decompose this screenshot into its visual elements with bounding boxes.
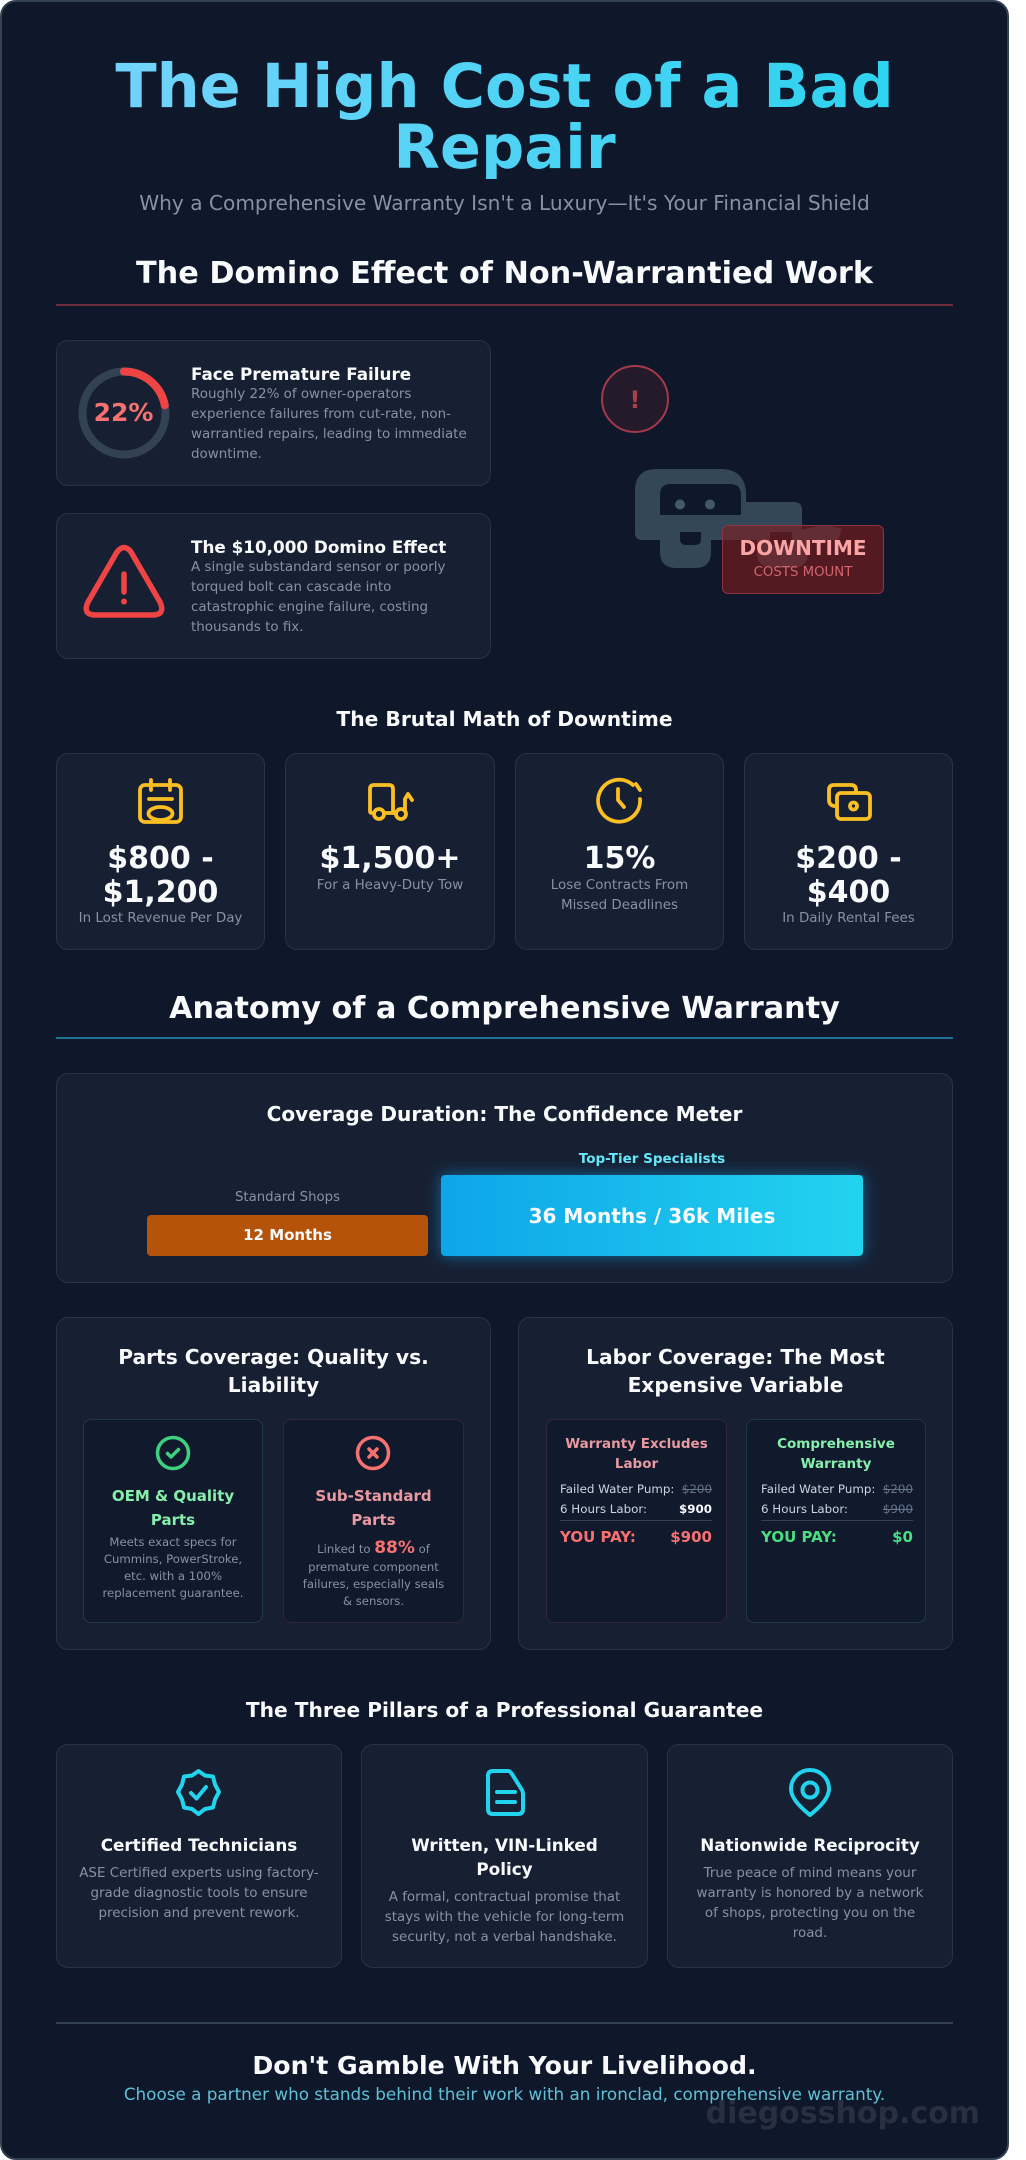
card title: Nationwide Reciprocity — [700, 1835, 920, 1855]
card text: security, not a verbal handshake. — [392, 1930, 617, 1945]
card text: grade diagnostic tools to ensure — [90, 1886, 308, 1901]
card text: torqued bolt can cascade into — [191, 580, 391, 594]
icon: warning triangle — [83, 544, 164, 618]
card title — [315, 1486, 432, 1528]
panel: labor coverage — [518, 1317, 953, 1650]
card text: & sensors. — [343, 1594, 404, 1608]
card text — [191, 386, 467, 462]
card text: warrantied repairs, leading to immediate — [191, 426, 467, 442]
panel: coverage duration — [56, 1073, 953, 1283]
watermark: diegosshop.com — [706, 2096, 980, 2131]
card title: Labor — [615, 1456, 658, 1472]
panel title: Expensive Variable — [628, 1372, 843, 1396]
total: $0 — [892, 1528, 913, 1546]
panel title: Labor Coverage: The Most — [586, 1345, 885, 1369]
panel: premature failure — [56, 340, 491, 486]
bar: 36 months: 36 Months / 36k Miles — [529, 1204, 775, 1228]
card text: replacement guarantee. — [103, 1586, 243, 1600]
title: The High Cost of a Bad — [115, 52, 894, 122]
card text: road. — [793, 1926, 827, 1941]
card text: failures, especially seals — [303, 1577, 444, 1591]
heading: brutal math: The Brutal Math of Downtime — [336, 707, 673, 731]
heading: three pillars: The Three Pillars of a Professional Guarantee — [246, 1698, 763, 1722]
footer text: Choose a partner who stands behind their work with an ironclad, comprehensive warranty. — [124, 2084, 885, 2104]
panel title — [118, 1345, 429, 1396]
total: YOU PAY: — [560, 1528, 636, 1546]
card title: Comprehensive — [777, 1436, 895, 1452]
stat value: $1,500+ — [320, 841, 460, 876]
bar: 12 months — [147, 1215, 428, 1256]
card title: Warranty Excludes — [565, 1436, 708, 1452]
stat value: 15% — [584, 841, 655, 876]
stat value: $200 - — [795, 841, 902, 876]
card: sub-standard parts — [283, 1419, 464, 1623]
card text: Cummins, PowerStroke, — [104, 1552, 242, 1566]
stat value — [103, 841, 218, 910]
card text — [103, 1535, 243, 1600]
footer heading: Don't Gamble With Your Livelihood. — [252, 2051, 757, 2080]
cost rows: Failed Water Pump: — [761, 1482, 875, 1496]
card text: precision and prevent rework. — [98, 1906, 300, 1921]
card text: A formal, contractual promise that — [389, 1890, 620, 1905]
card: comprehensive warranty — [746, 1419, 926, 1623]
card title: The $10,000 Domino Effect — [191, 537, 446, 557]
card text: of shops, protecting you on the — [705, 1906, 915, 1921]
donut chart: 22%: 22% — [94, 398, 153, 427]
label: top-tier specialists: Top-Tier Specialists — [579, 1151, 725, 1167]
card text — [191, 560, 445, 634]
cost rows: $900 — [679, 1502, 712, 1516]
panel title — [586, 1345, 885, 1396]
stat label: For a Heavy-Duty Tow — [317, 878, 463, 893]
card text: premature component — [308, 1560, 439, 1574]
bar: 36 months — [441, 1175, 863, 1256]
total: $900 — [670, 1528, 712, 1546]
icon: badge check — [176, 1769, 221, 1816]
card title — [112, 1486, 234, 1528]
total: YOU PAY: — [761, 1528, 837, 1546]
card: warranty excludes labor — [546, 1419, 727, 1623]
stat label: In Daily Rental Fees — [782, 911, 915, 926]
icon: cash — [827, 783, 872, 821]
title — [0, 57, 1009, 179]
subtitle: Why a Comprehensive Warranty Isn't a Luxury—It's Your Financial Shield — [139, 191, 870, 215]
icon: calendar with money — [138, 778, 183, 824]
stat card: tow — [285, 753, 495, 950]
stat label: Lose Contracts From — [551, 878, 688, 893]
stat card: lost contracts — [515, 753, 724, 950]
callout: downtime — [722, 525, 884, 594]
card title: Policy — [476, 1859, 533, 1879]
cost rows — [560, 1482, 712, 1516]
stat value — [795, 841, 902, 910]
card text: etc. with a 100% — [124, 1569, 222, 1583]
card title — [565, 1436, 708, 1472]
icon: check circle — [156, 1436, 190, 1470]
card title: Written, VIN-Linked — [411, 1835, 598, 1855]
pillar card: certified technicians — [56, 1744, 342, 1968]
cost rows: Failed Water Pump: — [560, 1482, 674, 1496]
cost rows: 6 Hours Labor: — [560, 1502, 647, 1516]
card text: stays with the vehicle for long-term — [385, 1910, 624, 1925]
card text: Linked to 88% of — [317, 1538, 430, 1558]
pillar card: written policy — [361, 1744, 648, 1968]
panel title: Parts Coverage: Quality vs. — [118, 1345, 429, 1369]
callout: downtime: DOWNTIME — [739, 536, 867, 560]
stat card: lost revenue — [56, 753, 265, 950]
total — [560, 1528, 712, 1546]
cost rows: $900 — [883, 1502, 913, 1516]
stat label — [551, 878, 688, 913]
card title: OEM & Quality — [112, 1486, 234, 1504]
donut chart: 22% — [78, 368, 170, 458]
card title: Parts — [151, 1510, 195, 1528]
callout: downtime: COSTS MOUNT — [754, 565, 852, 580]
stat value: $400 — [807, 875, 890, 910]
card title — [411, 1835, 598, 1879]
card text: A single substandard sensor or poorly — [191, 560, 445, 574]
stat card: rental fees — [744, 753, 953, 950]
stat label: In Lost Revenue Per Day — [79, 911, 242, 926]
card text: True peace of mind means your — [704, 1866, 916, 1881]
icon: x circle — [356, 1436, 390, 1470]
card text: Meets exact specs for — [109, 1535, 237, 1549]
card text: thousands to fix. — [191, 620, 304, 634]
card: OEM parts — [83, 1419, 263, 1623]
panel: parts coverage — [56, 1317, 491, 1650]
icon: map pin — [789, 1768, 831, 1817]
panel title: Coverage Duration: The Confidence Meter — [267, 1102, 742, 1126]
title: Repair — [393, 113, 616, 183]
card text: downtime. — [191, 446, 262, 462]
card text: ASE Certified experts using factory- — [79, 1866, 319, 1881]
card text: catastrophic engine failure, costing — [191, 600, 428, 614]
stat label: Missed Deadlines — [561, 898, 678, 913]
pillar card: nationwide reciprocity — [667, 1744, 953, 1968]
cost rows — [761, 1482, 913, 1516]
illustration: broken-down truck — [635, 469, 842, 568]
card title: Warranty — [801, 1456, 871, 1472]
card text — [303, 1538, 444, 1608]
card title: Sub-Standard — [315, 1486, 432, 1504]
heading: anatomy: Anatomy of a Comprehensive Warranty — [169, 990, 840, 1026]
card text: Roughly 22% of owner-operators — [191, 386, 411, 402]
heading: domino effect: The Domino Effect of Non-Warrantied Work — [136, 256, 873, 291]
card title: Face Premature Failure — [191, 364, 411, 384]
label: standard shops: Standard Shops — [235, 1190, 340, 1205]
icon: clock — [596, 778, 642, 824]
cost rows: $200 — [682, 1482, 712, 1496]
card text — [385, 1890, 624, 1945]
cost rows: $200 — [883, 1482, 913, 1496]
card title: Certified Technicians — [101, 1835, 297, 1855]
icon: document — [486, 1769, 525, 1816]
panel: domino cost — [56, 513, 491, 659]
cost rows: 6 Hours Labor: — [761, 1502, 848, 1516]
panel title: Liability — [228, 1372, 319, 1396]
stat value: $800 - — [107, 841, 214, 876]
card text — [79, 1866, 319, 1921]
icon: alert circle — [601, 365, 669, 433]
card text: experience failures from cut-rate, non- — [191, 406, 451, 422]
stat value: $1,200 — [103, 875, 218, 910]
card title: Parts — [351, 1510, 396, 1528]
bar: 12 months: 12 Months — [243, 1226, 332, 1244]
icon: alert circle: ! — [630, 386, 640, 414]
card text: warranty is honored by a network — [697, 1886, 923, 1901]
total — [760, 1528, 913, 1546]
card text — [697, 1866, 924, 1941]
card title — [777, 1436, 895, 1472]
icon: tow truck — [368, 783, 414, 821]
